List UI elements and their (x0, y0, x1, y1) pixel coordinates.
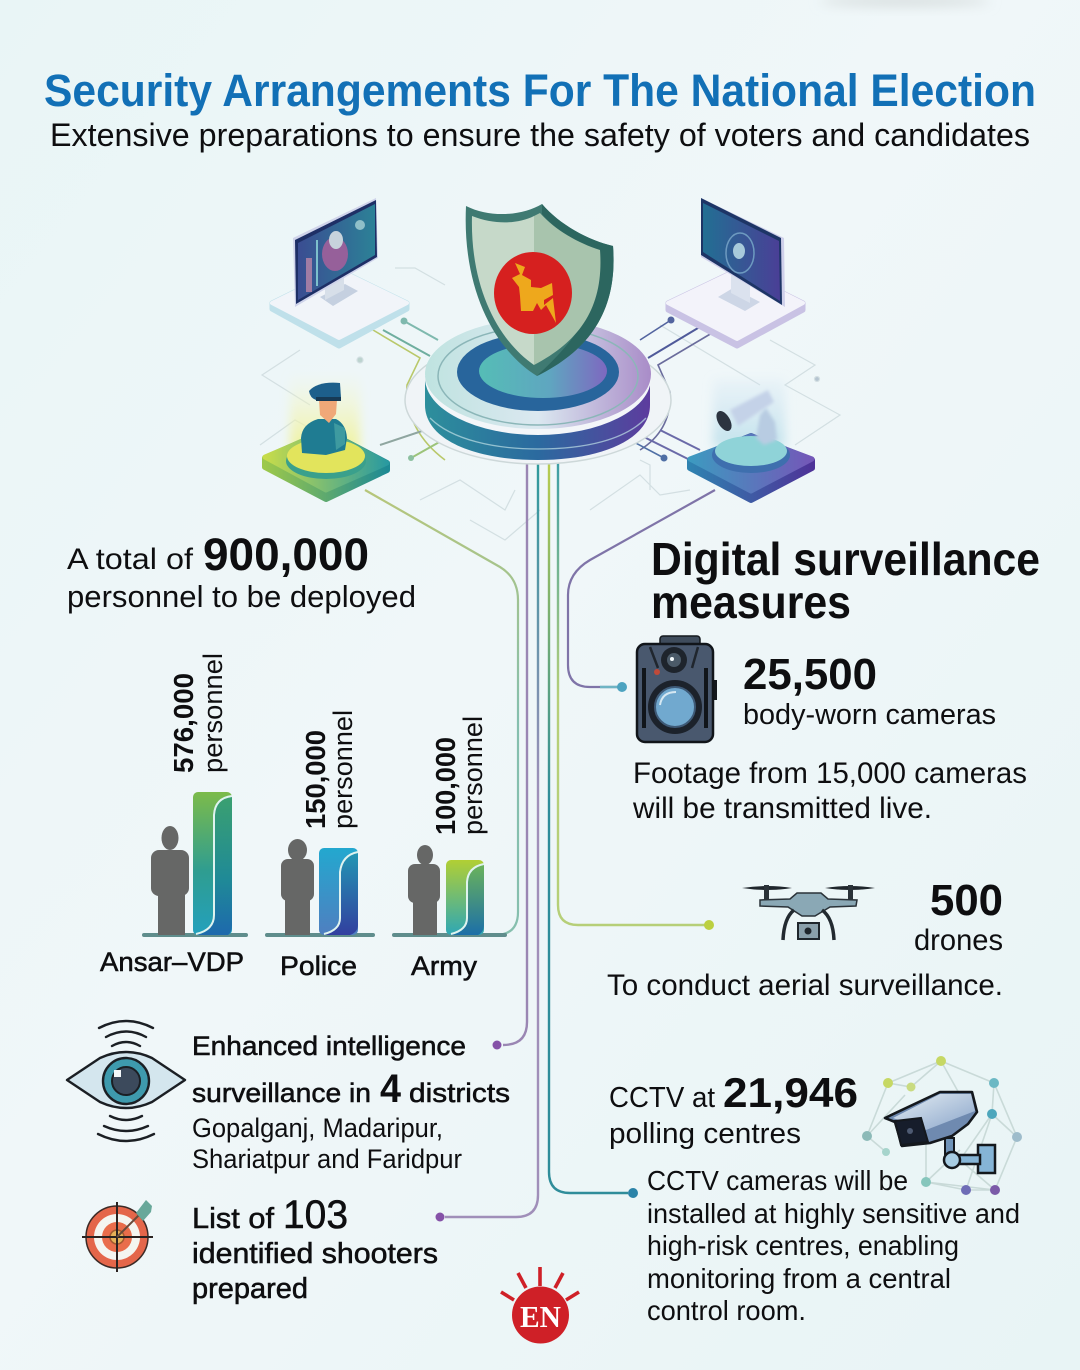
guard figure (301, 383, 347, 455)
police column: Police (280, 951, 357, 981)
map of Bangladesh (512, 263, 556, 323)
ansar-vdp column: Ansar–VDP (100, 947, 244, 977)
army column: personnel (458, 716, 488, 835)
icon: body-worn camera (637, 636, 717, 742)
body cameras text: 25,500 (743, 650, 877, 699)
intelligence text: Gopalganj, Madaripur, (192, 1113, 443, 1143)
connector: shooters (436, 462, 538, 1222)
mount (978, 1145, 995, 1173)
connector lines from hub (373, 316, 712, 462)
cctv description: CCTV cameras will be (647, 1165, 908, 1196)
stand (320, 284, 358, 306)
drones text: 500 (930, 876, 1003, 925)
shooters text: List of (192, 1203, 275, 1235)
personnel total: 900,000 (203, 529, 369, 580)
connector: intelligence (492, 462, 527, 1050)
connector: body cameras (568, 490, 715, 692)
bar chart: personnel by force (100, 653, 507, 981)
cctv description (647, 1165, 1020, 1326)
hub disc (425, 319, 651, 460)
central hub with shield (405, 204, 671, 464)
guard on green platform (265, 372, 387, 499)
body cameras text: Footage from 15,000 cameras (633, 757, 1027, 790)
army column: Army (411, 951, 478, 981)
ansar-vdp column: 576,000 (168, 673, 199, 773)
stand (718, 288, 760, 311)
subtitle: Extensive preparations to ensure the safety of voters and candidates (50, 117, 1030, 153)
intelligence text (192, 1031, 510, 1174)
drones text: drones (914, 924, 1003, 957)
left monitor on platform (272, 198, 407, 346)
cctv description: high-risk centres, enabling (647, 1230, 959, 1261)
personnel total: A total of (67, 543, 194, 576)
ghost camera (713, 390, 777, 445)
logo: EN (501, 1267, 579, 1344)
connector: personnel to chart (365, 490, 518, 935)
army column (392, 716, 507, 981)
cctv on blue platform (690, 379, 812, 500)
connector: drones (558, 462, 714, 930)
police column: personnel (328, 710, 358, 829)
body cameras text: will be transmitted live. (632, 792, 932, 825)
cctv count text (609, 1069, 858, 1150)
heading: digital surveillance: measures (651, 576, 851, 628)
circuit background lines (260, 268, 840, 540)
intelligence text: 4 (380, 1067, 402, 1111)
drones text: To conduct aerial surveillance. (607, 969, 1003, 1002)
right monitor on platform (668, 198, 803, 346)
body cameras text (632, 650, 1027, 825)
shield (466, 204, 614, 376)
personnel total: personnel to be deployed (67, 579, 416, 614)
personnel total (67, 529, 416, 614)
icon: drone (742, 885, 875, 940)
cctv description: control room. (647, 1295, 806, 1326)
police column: 150,000 (300, 730, 331, 829)
army column: 100,000 (430, 737, 461, 835)
intelligence text: Shariatpur and Faridpur (192, 1144, 462, 1174)
title: Security Arrangements For The National Election (44, 65, 1036, 116)
hub halo (405, 336, 671, 464)
connector: cctv (549, 462, 638, 1198)
intelligence text: districts (409, 1078, 510, 1108)
shooters text: 103 (283, 1193, 348, 1237)
intelligence text: surveillance in (192, 1078, 371, 1108)
shooters text: prepared (192, 1273, 308, 1305)
police column (265, 710, 375, 981)
cctv count text: polling centres (609, 1118, 801, 1150)
cctv description: monitoring from a central (647, 1263, 951, 1294)
logo: EN: EN (520, 1299, 561, 1334)
drones text (607, 876, 1003, 1002)
heading: digital surveillance (651, 533, 1040, 628)
shooters text (192, 1193, 438, 1305)
icon: cctv camera with network (862, 1056, 1022, 1195)
icon: target with arrow (82, 1200, 153, 1272)
heading: digital surveillance: Digital surveillance (651, 533, 1040, 585)
cctv count text: CCTV at (609, 1082, 715, 1114)
intelligence text: Enhanced intelligence (192, 1031, 466, 1061)
camera body (885, 1092, 977, 1146)
cctv count text: 21,946 (723, 1069, 858, 1116)
body cameras text: body-worn cameras (743, 699, 996, 731)
cctv description: installed at highly sensitive and (647, 1198, 1020, 1229)
ansar-vdp column (100, 653, 248, 977)
icon: eye with signal waves (67, 1021, 185, 1141)
ansar-vdp column: personnel (198, 653, 228, 773)
shooters text: identified shooters (192, 1238, 438, 1270)
